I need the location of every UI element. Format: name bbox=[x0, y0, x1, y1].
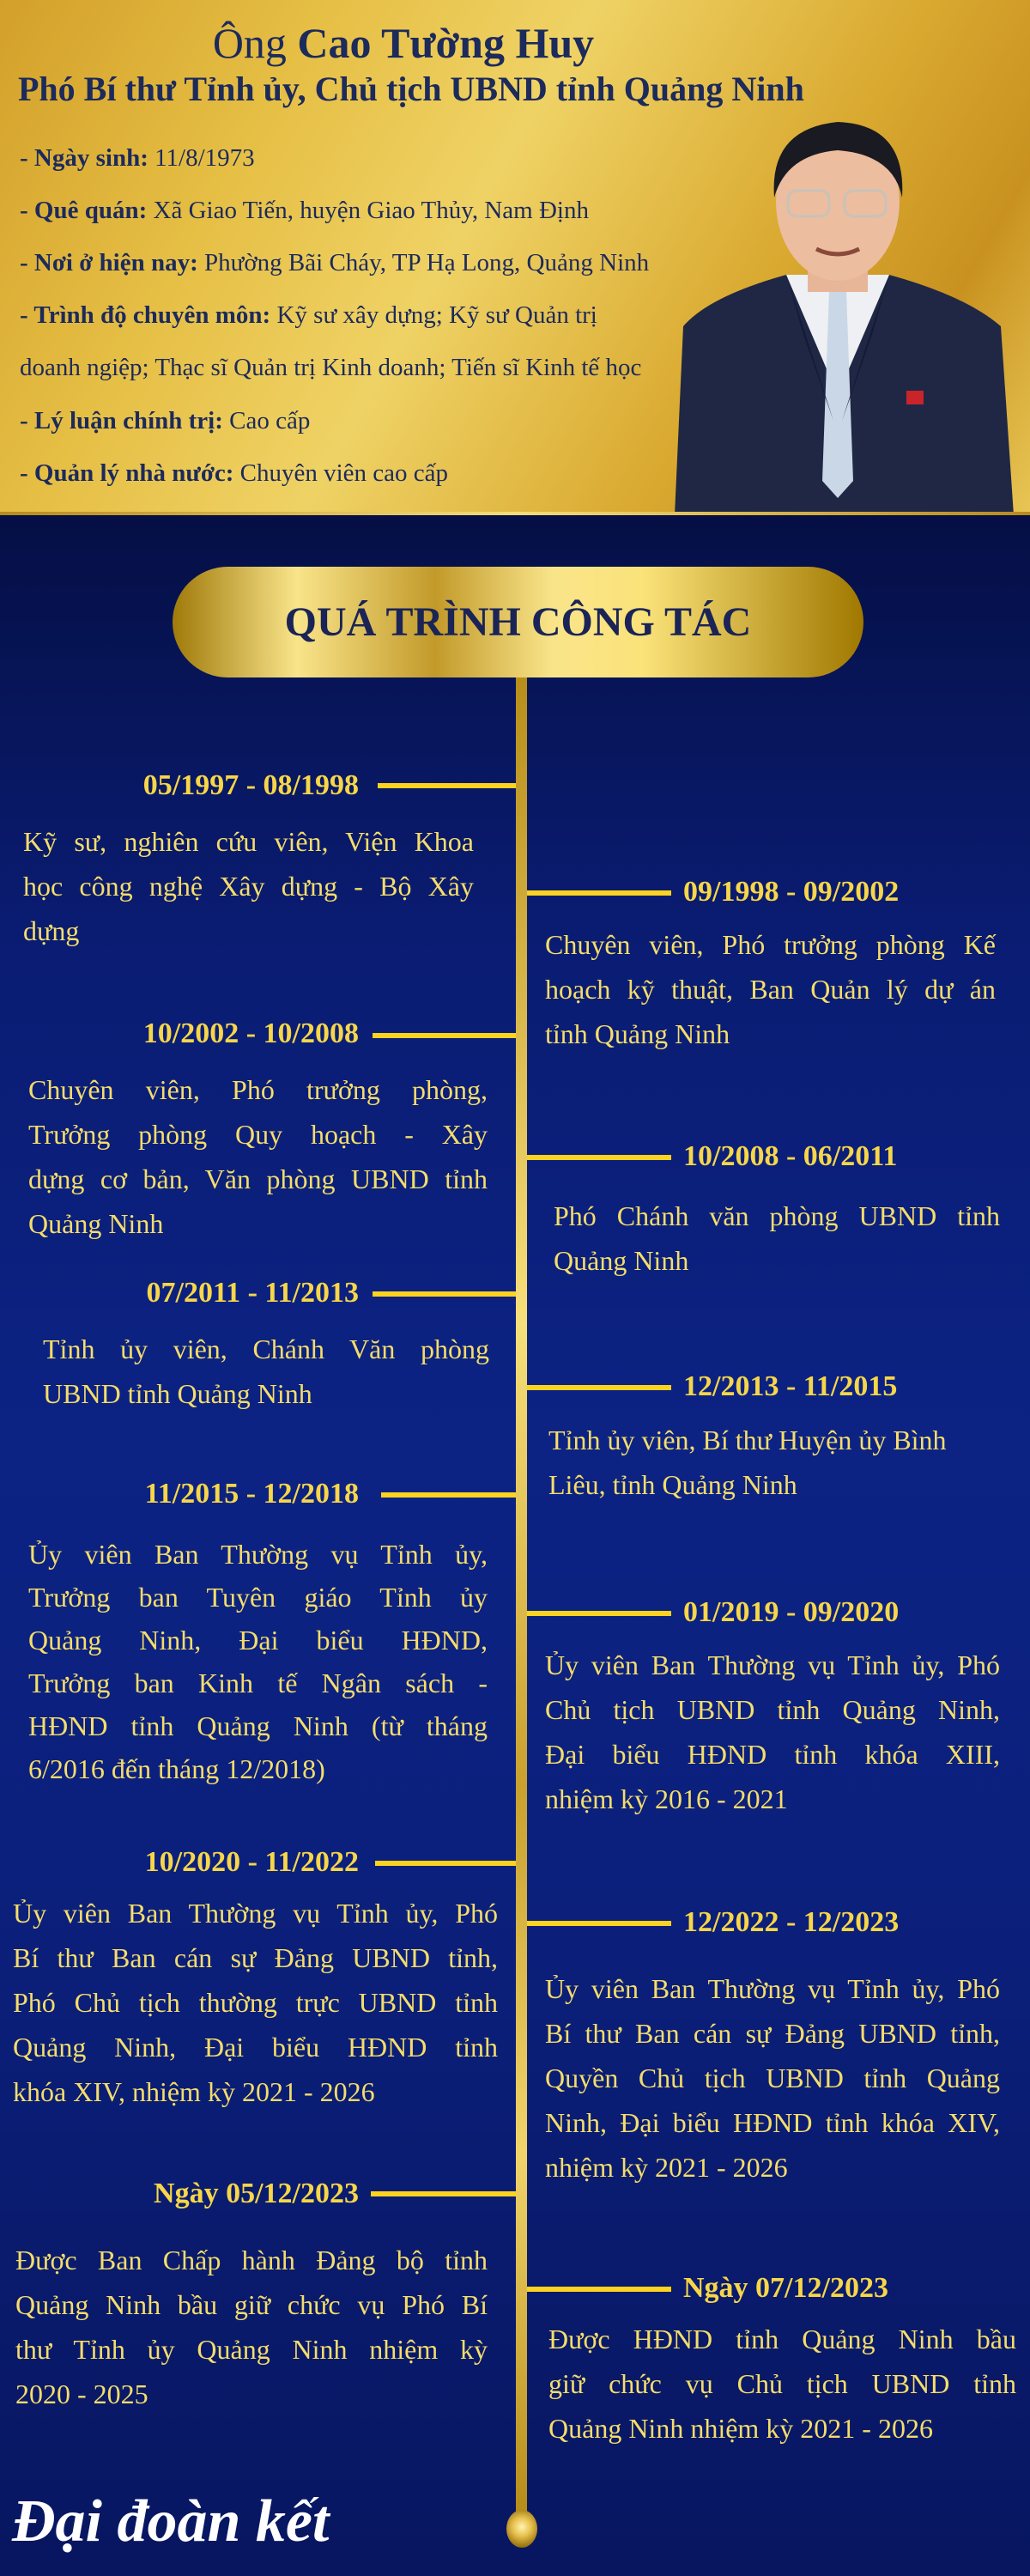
info: state management: - Quản lý nhà nước: Chuyên viên cao cấp bbox=[20, 459, 448, 487]
description: Ủy viên Ban Thường vụ Tỉnh ủy, Phó bbox=[545, 1649, 1000, 1680]
description: Quyền Chủ tịch UBND tỉnh Quảng bbox=[545, 2063, 1000, 2093]
entry 5 bbox=[43, 1277, 516, 1409]
description: Ủy viên Ban Thường vụ Tỉnh ủy, Phó bbox=[13, 1898, 498, 1929]
description: thư Tỉnh ủy Quảng Ninh nhiệm kỳ bbox=[15, 2334, 488, 2365]
entry 6 bbox=[527, 1370, 947, 1500]
connector bbox=[371, 2191, 516, 2196]
entry 3 bbox=[28, 1018, 516, 1239]
date: 10/2002 - 10/2008 bbox=[143, 1018, 359, 1049]
date: 10/2020 - 11/2022 bbox=[145, 1846, 359, 1878]
timeline section background bbox=[0, 515, 1030, 2576]
info: education: - Trình độ chuyên môn: Kỹ sư xây dựng; Kỹ sư Quản trị bbox=[20, 301, 597, 329]
description: Bí thư Ban cán sự Đảng UBND tỉnh, bbox=[13, 1942, 498, 1973]
description: Ủy viên Ban Thường vụ Tỉnh ủy, Phó bbox=[545, 1973, 1000, 2004]
description: nhiệm kỳ 2021 - 2026 bbox=[545, 2152, 788, 2183]
timeline end knob bbox=[506, 2510, 537, 2548]
description: tỉnh Quảng Ninh bbox=[545, 1018, 730, 1049]
description: Trưởng phòng Quy hoạch - Xây bbox=[28, 1119, 488, 1150]
date: 12/2022 - 12/2023 bbox=[683, 1906, 899, 1938]
heading pill: QUÁ TRÌNH CÔNG TÁC: QUÁ TRÌNH CÔNG TÁC bbox=[285, 599, 751, 645]
description: Chuyên viên, Phó trưởng phòng Kế bbox=[545, 929, 996, 960]
description: Tỉnh ủy viên, Chánh Văn phòng bbox=[43, 1334, 489, 1364]
entry 11 bbox=[15, 2178, 516, 2409]
description: Được Ban Chấp hành Đảng bộ tỉnh bbox=[15, 2245, 488, 2275]
description: 6/2016 đến tháng 12/2018) bbox=[28, 1753, 325, 1784]
timeline vertical line bbox=[516, 677, 527, 2524]
description: Chuyên viên, Phó trưởng phòng, bbox=[28, 1074, 488, 1105]
description: Quảng Ninh bbox=[554, 1245, 688, 1276]
description: Trưởng ban Kinh tế Ngân sách - bbox=[28, 1668, 488, 1698]
title: name: Ông Cao Tường Huy bbox=[213, 19, 594, 67]
description: Liêu, tỉnh Quảng Ninh bbox=[548, 1469, 797, 1500]
connector bbox=[527, 2287, 671, 2292]
description bbox=[28, 1539, 488, 1784]
description: hoạch kỹ thuật, Ban Quản lý dự án bbox=[545, 974, 996, 1005]
description bbox=[43, 1334, 489, 1409]
connector bbox=[373, 1291, 516, 1297]
info: education bbox=[20, 301, 641, 381]
description: Quảng Ninh, Đại biểu HĐND, bbox=[28, 1625, 488, 1656]
date: 11/2015 - 12/2018 bbox=[145, 1478, 359, 1510]
description: dựng cơ bản, Văn phòng UBND tỉnh bbox=[28, 1163, 488, 1194]
date: 10/2008 - 06/2011 bbox=[683, 1140, 897, 1172]
info: education: doanh ngiệp; Thạc sĩ Quản trị Kinh doanh; Tiến sĩ Kinh tế học bbox=[20, 354, 641, 381]
entry 4 bbox=[527, 1140, 1000, 1276]
logo: Đại đoàn kết: Đại đoàn kết bbox=[12, 2488, 329, 2555]
connector bbox=[527, 890, 671, 896]
entry 7 bbox=[28, 1478, 516, 1784]
date: 05/1997 - 08/1998 bbox=[143, 769, 359, 801]
info: residence: - Nơi ở hiện nay: Phường Bãi Cháy, TP Hạ Long, Quảng Ninh bbox=[20, 249, 649, 276]
portrait bbox=[675, 122, 1014, 512]
description: Quảng Ninh, Đại biểu HĐND tỉnh bbox=[13, 2032, 498, 2063]
description bbox=[545, 1973, 1000, 2183]
description: Tỉnh ủy viên, Bí thư Huyện ủy Bình bbox=[548, 1425, 947, 1455]
description: Ninh, Đại biểu HĐND tỉnh khóa XIV, bbox=[545, 2107, 1000, 2138]
entry 8 bbox=[527, 1596, 1000, 1814]
description bbox=[13, 1898, 498, 2107]
description: UBND tỉnh Quảng Ninh bbox=[43, 1378, 312, 1409]
description: giữ chức vụ Chủ tịch UBND tỉnh bbox=[548, 2368, 1016, 2399]
date: 07/2011 - 11/2013 bbox=[147, 1277, 359, 1309]
connector bbox=[527, 1155, 671, 1160]
gold divider bbox=[0, 512, 1030, 517]
date: Ngày 07/12/2023 bbox=[683, 2272, 888, 2304]
description bbox=[554, 1200, 1000, 1276]
connector bbox=[527, 1385, 671, 1390]
description: Bí thư Ban cán sự Đảng UBND tỉnh, bbox=[545, 2018, 1000, 2049]
date: Ngày 05/12/2023 bbox=[154, 2178, 359, 2209]
date: 12/2013 - 11/2015 bbox=[683, 1370, 897, 1402]
connector bbox=[381, 1492, 516, 1498]
description bbox=[548, 1425, 947, 1500]
description: Phó Chánh văn phòng UBND tỉnh bbox=[554, 1200, 1000, 1231]
entry 12 bbox=[527, 2272, 1016, 2444]
description: Đại biểu HĐND tỉnh khóa XIII, bbox=[545, 1739, 1000, 1770]
description: Phó Chủ tịch thường trực UBND tỉnh bbox=[13, 1987, 498, 2018]
entry 10 bbox=[527, 1906, 1000, 2183]
description: Trưởng ban Tuyên giáo Tỉnh ủy bbox=[28, 1582, 488, 1613]
description: nhiệm kỳ 2016 - 2021 bbox=[545, 1783, 788, 1814]
description bbox=[545, 1649, 1000, 1814]
connector bbox=[378, 783, 516, 788]
connector bbox=[375, 1861, 516, 1866]
header panel bbox=[0, 0, 1030, 515]
entry 1 bbox=[23, 769, 516, 946]
info: hometown: - Quê quán: Xã Giao Tiến, huyện Giao Thủy, Nam Định bbox=[20, 197, 589, 224]
description: khóa XIV, nhiệm kỳ 2021 - 2026 bbox=[13, 2076, 375, 2107]
entry 9 bbox=[13, 1846, 516, 2107]
info: birth date: - Ngày sinh: 11/8/1973 bbox=[20, 144, 255, 172]
heading pill: QUÁ TRÌNH CÔNG TÁC bbox=[173, 567, 863, 677]
description bbox=[28, 1074, 488, 1239]
connector bbox=[527, 1921, 671, 1926]
description bbox=[15, 2245, 488, 2409]
description: Quảng Ninh bbox=[28, 1208, 163, 1239]
info: political theory: - Lý luận chính trị: Cao cấp bbox=[20, 407, 310, 434]
description bbox=[545, 929, 997, 1049]
entry 2 bbox=[527, 876, 997, 1049]
description: Chủ tịch UBND tỉnh Quảng Ninh, bbox=[545, 1694, 1000, 1725]
connector bbox=[527, 1611, 671, 1616]
description: dựng bbox=[23, 915, 79, 946]
date: 01/2019 - 09/2020 bbox=[683, 1596, 899, 1628]
description: Quảng Ninh bầu giữ chức vụ Phó Bí bbox=[15, 2289, 488, 2320]
description bbox=[548, 2324, 1016, 2444]
date: 09/1998 - 09/2002 bbox=[683, 876, 899, 908]
connector bbox=[373, 1033, 516, 1038]
description: Ủy viên Ban Thường vụ Tỉnh ủy, bbox=[28, 1539, 488, 1570]
description: 2020 - 2025 bbox=[15, 2379, 148, 2409]
description: Kỹ sư, nghiên cứu viên, Viện Khoa bbox=[23, 826, 474, 857]
description bbox=[23, 826, 474, 946]
subtitle: position: Phó Bí thư Tỉnh ủy, Chủ tịch UBND tỉnh Quảng Ninh bbox=[18, 70, 804, 108]
description: HĐND tỉnh Quảng Ninh (từ tháng bbox=[28, 1710, 488, 1741]
description: Được HĐND tỉnh Quảng Ninh bầu bbox=[548, 2324, 1016, 2354]
description: Quảng Ninh nhiệm kỳ 2021 - 2026 bbox=[548, 2413, 933, 2444]
description: học công nghệ Xây dựng - Bộ Xây bbox=[23, 871, 474, 902]
